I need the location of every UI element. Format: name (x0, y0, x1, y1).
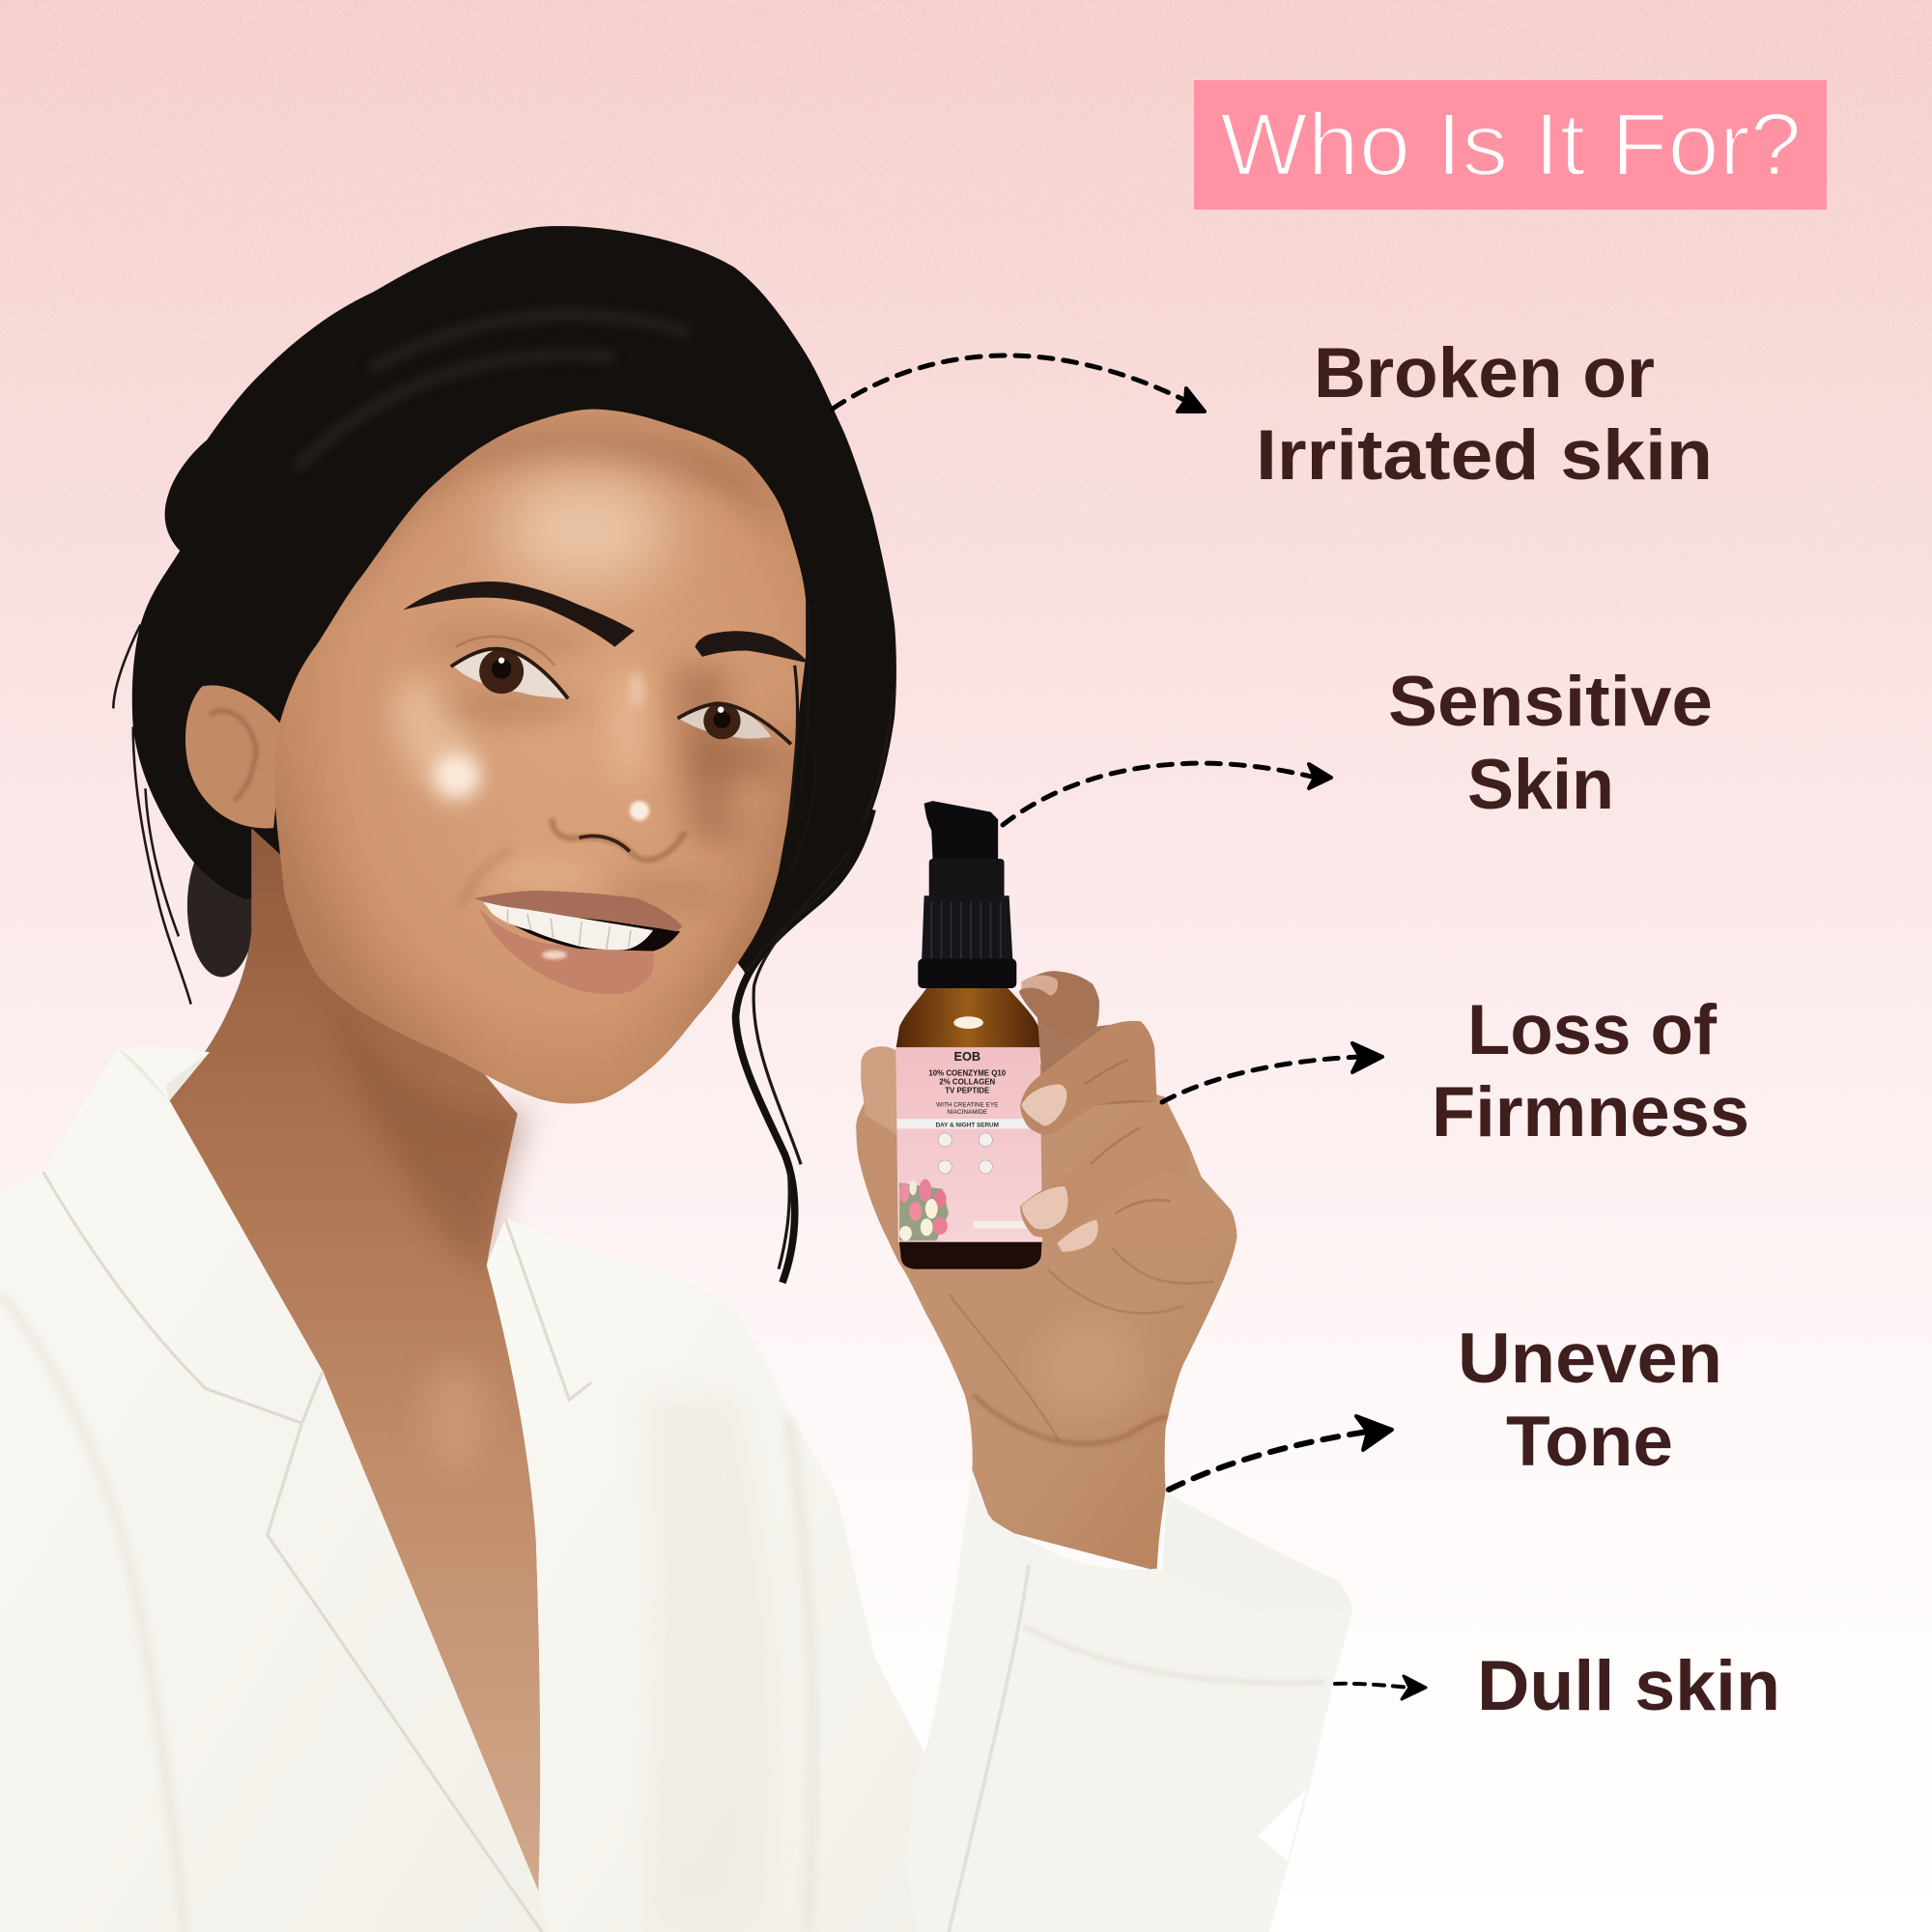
hair shine (296, 315, 690, 469)
pump actuator (924, 801, 998, 860)
amber glass (895, 988, 1040, 1050)
bun (187, 835, 256, 977)
label: Loss of Firmness: Firmness (1432, 1073, 1749, 1151)
label (895, 1047, 1042, 1242)
label icons (938, 1133, 992, 1174)
neck and chest (169, 828, 540, 1891)
label text: NIACINAMIDE (947, 1109, 987, 1116)
title text: Who Is It For? (1220, 96, 1802, 194)
label: Sensitive Skin: Skin (1467, 746, 1614, 824)
palm creases (949, 1244, 1213, 1443)
jacket body (0, 1047, 926, 1932)
arrow to Broken or Irritated skin (833, 355, 1205, 412)
title badge (1194, 80, 1827, 210)
neck shadow (323, 985, 529, 1275)
upper lip (474, 891, 683, 931)
teeth (483, 902, 653, 950)
nose (552, 818, 685, 860)
label text (928, 1049, 1007, 1116)
ring finger (1020, 1102, 1189, 1237)
loose strands (735, 810, 872, 1283)
label: Uneven Tone: Tone (1506, 1403, 1673, 1481)
face (274, 409, 806, 1104)
small label panel (974, 1221, 1035, 1229)
label: Loss of Firmness (1432, 991, 1749, 1151)
mouth opening (483, 902, 680, 952)
label band text: DAY & NIGHT SERUM (936, 1122, 999, 1128)
label: Dull skin: Dull skin (1477, 1647, 1780, 1725)
label text: 10% COENZYME Q10 (928, 1069, 1007, 1078)
right eye (678, 702, 791, 744)
label: Broken or Irritated skin: Irritated skin (1256, 416, 1713, 495)
cheek glow (434, 754, 649, 820)
face shading and highlights (276, 418, 796, 1047)
left eye (451, 637, 568, 698)
label text: TV PEPTIDE (945, 1086, 989, 1094)
arrow to Sensitive Skin (1003, 763, 1331, 825)
little finger (1055, 1173, 1237, 1257)
label: Broken or Irritated skin (1256, 334, 1713, 495)
label: Uneven Tone (1458, 1320, 1722, 1481)
ribbed cap (922, 895, 1012, 961)
tulips (899, 1179, 949, 1240)
bottle base (898, 1233, 1042, 1269)
thumb (861, 1046, 905, 1140)
arrow to Loss of Firmness (1162, 1043, 1382, 1102)
arrow to Dull skin (1335, 1676, 1426, 1699)
label: Broken or Irritated skin: Broken or (1314, 334, 1655, 412)
label: Sensitive Skin: Sensitive (1388, 663, 1713, 741)
knuckle shading (1084, 1060, 1171, 1213)
nose highlight (630, 801, 649, 820)
back of hand behind fingers (1037, 1018, 1157, 1105)
finger nails (1021, 976, 1098, 1252)
label: Uneven Tone: Uneven (1458, 1320, 1722, 1398)
lapel lines (43, 1172, 542, 1932)
label text: WITH CREATINE EYE (936, 1101, 998, 1108)
hair strands over face (788, 604, 814, 875)
collarbone highlight (421, 1361, 491, 1472)
label text: 2% COLLAGEN (939, 1077, 996, 1086)
hair (113, 226, 896, 1283)
right eyebrow (695, 631, 809, 663)
left eyebrow (403, 582, 635, 647)
sleeve cuff (905, 1470, 1352, 1932)
label text: EOB (953, 1049, 980, 1064)
lips and smile (474, 891, 683, 994)
top finger (1019, 971, 1099, 1037)
label: Loss of Firmness: Loss of (1467, 991, 1718, 1069)
middle finger (1020, 1021, 1157, 1135)
collar fold (117, 1048, 210, 1101)
arrow to Uneven Tone (1169, 1416, 1392, 1490)
label: Sensitive Skin (1388, 663, 1713, 824)
pump collar (929, 859, 1005, 902)
model with product illustration (0, 226, 1352, 1932)
base ring (918, 958, 1016, 988)
label band (897, 1119, 1041, 1128)
serum bottle (895, 801, 1042, 1269)
ear (185, 685, 283, 828)
hand palm and wrist (856, 1060, 1237, 1571)
lower lip (479, 908, 654, 994)
